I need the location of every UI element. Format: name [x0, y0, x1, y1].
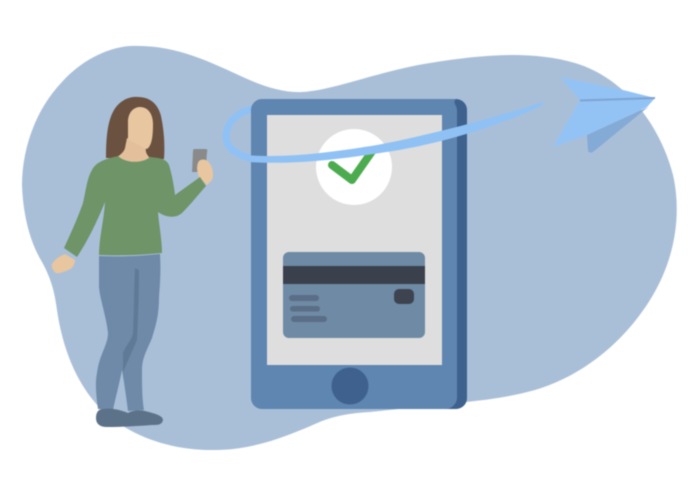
card body	[283, 252, 425, 338]
credit card	[283, 252, 425, 338]
tablet side edge	[380, 99, 467, 409]
swoosh tail over tablet	[249, 102, 543, 163]
magnetic stripe	[283, 266, 425, 284]
plane wings	[553, 77, 655, 147]
home button	[332, 368, 368, 404]
tablet screen	[267, 115, 442, 365]
shoes	[96, 409, 163, 427]
card text lines	[289, 295, 327, 322]
confirmation badge	[316, 129, 392, 205]
card chip	[394, 289, 414, 304]
woman holding phone	[52, 97, 213, 427]
tablet	[251, 99, 467, 409]
left hand	[52, 254, 75, 273]
plane shadow wing	[587, 107, 648, 153]
jeans	[96, 254, 160, 411]
plane fold	[580, 98, 655, 100]
swoosh loop behind tablet	[226, 109, 253, 158]
background blob	[22, 46, 677, 450]
sweater	[64, 156, 206, 257]
face	[128, 107, 153, 149]
check mark	[332, 150, 373, 180]
neck	[117, 138, 150, 166]
tablet body	[251, 99, 457, 409]
phone	[192, 149, 207, 172]
hair	[106, 97, 164, 159]
paper plane	[553, 77, 655, 153]
right hand	[197, 160, 213, 185]
jeans fold	[123, 268, 139, 372]
